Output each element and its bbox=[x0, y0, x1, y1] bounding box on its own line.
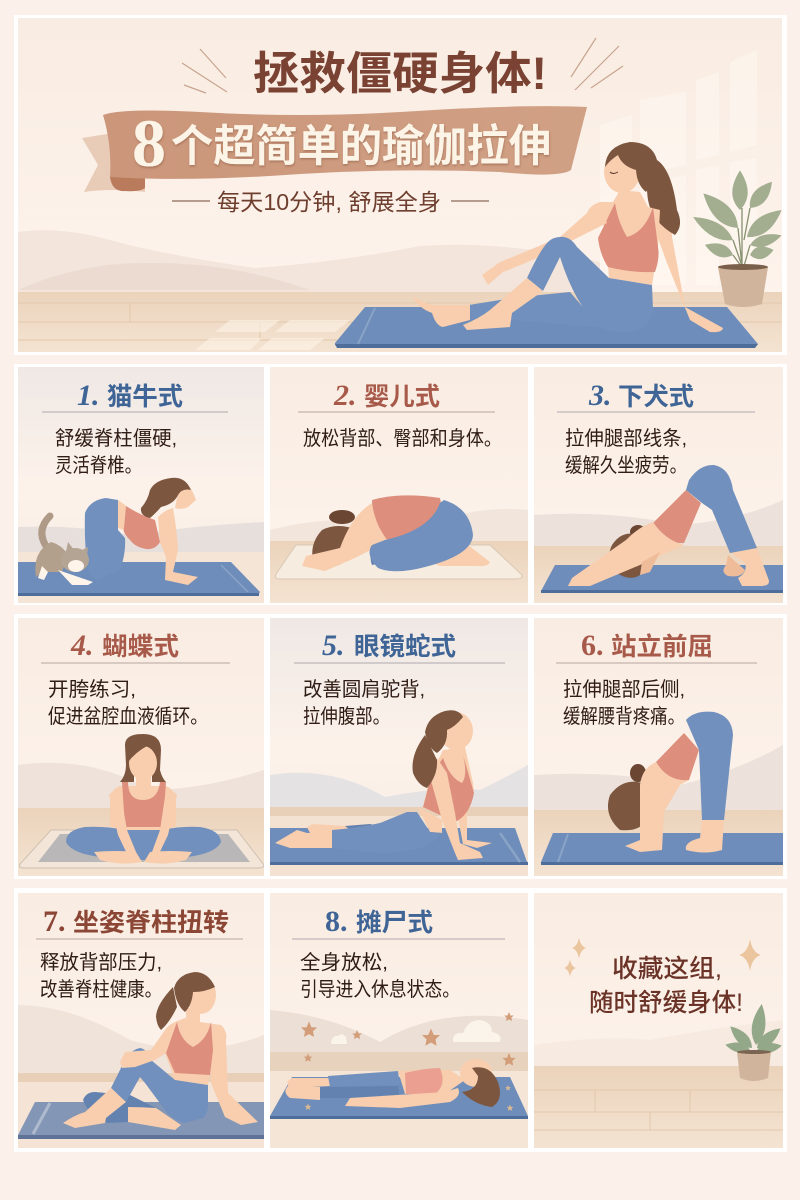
figure: child pose bbox=[302, 495, 490, 571]
panel: 5 cobra bbox=[270, 618, 528, 876]
figure: downward dog bbox=[568, 465, 769, 586]
ribbon banner bbox=[82, 105, 587, 192]
figure: cat-cow pose bbox=[85, 478, 198, 585]
panel: 2 child pose bbox=[270, 367, 528, 603]
description: 放松背部、臀部和身体。 bbox=[303, 427, 502, 450]
panel: 3 downward dog bbox=[534, 367, 783, 603]
figure: seated twist bbox=[63, 972, 258, 1130]
heading: 站立前屈 bbox=[611, 633, 713, 661]
heading: 5. bbox=[322, 629, 344, 662]
description: 开胯练习, bbox=[48, 678, 136, 701]
panel: 1 cat-cow bbox=[18, 367, 264, 603]
icon: potted plant bbox=[724, 1003, 784, 1081]
description bbox=[303, 678, 425, 728]
panel: 6 standing forward fold bbox=[534, 618, 783, 876]
yoga mat bbox=[270, 828, 528, 865]
closing message: 随时舒缓身体! bbox=[589, 989, 743, 1017]
figure: seated woman bbox=[413, 142, 723, 332]
ribbon banner: 8 bbox=[132, 105, 166, 181]
description: 灵活脊椎。 bbox=[55, 454, 142, 477]
icon: cat bbox=[35, 516, 93, 585]
panel: hero banner bbox=[18, 18, 786, 352]
description: 全身放松, bbox=[300, 951, 388, 974]
description: 拉伸腹部。 bbox=[303, 705, 390, 728]
figure: butterfly pose bbox=[66, 734, 221, 864]
heading: 眼镜蛇式 bbox=[354, 632, 456, 661]
figure: corpse pose bbox=[285, 1059, 500, 1108]
yoga mat bbox=[541, 565, 783, 593]
closing message: 收藏这组, bbox=[612, 955, 722, 983]
yoga mat bbox=[18, 562, 260, 596]
panel: 4 butterfly bbox=[18, 618, 264, 876]
description: 拉伸腿部后侧, bbox=[563, 678, 685, 701]
heading: 4. bbox=[70, 629, 94, 662]
yoga mat bbox=[335, 307, 758, 348]
description: 缓解腰背疼痛。 bbox=[563, 705, 685, 728]
description: 改善圆肩驼背, bbox=[303, 678, 425, 701]
heading: 2. bbox=[333, 379, 356, 412]
description: 舒缓脊柱僵硬, bbox=[55, 427, 177, 450]
heading: 3. bbox=[588, 379, 612, 412]
description bbox=[40, 951, 162, 1001]
description: 拉伸腿部线条, bbox=[565, 427, 687, 450]
description: 促进盆腔血液循环。 bbox=[48, 705, 208, 728]
icon: clouds bbox=[331, 1020, 501, 1044]
description bbox=[48, 679, 196, 726]
description bbox=[300, 951, 460, 1001]
heading: 7. bbox=[43, 905, 66, 938]
heading: 摊尸式 bbox=[356, 909, 433, 937]
heading: 下犬式 bbox=[618, 383, 694, 411]
rays bbox=[182, 38, 623, 93]
icon: potted plant bbox=[690, 170, 786, 307]
heading: 1. bbox=[77, 379, 100, 412]
yoga mat bbox=[270, 1077, 528, 1119]
ribbon banner: 个超简单的瑜伽拉伸 bbox=[171, 122, 551, 171]
panel: 7 seated twist bbox=[18, 893, 264, 1148]
heading: 8. bbox=[325, 905, 348, 938]
figure: cobra pose bbox=[275, 710, 492, 860]
description bbox=[55, 427, 177, 477]
description bbox=[563, 678, 685, 728]
heading: 婴儿式 bbox=[364, 383, 440, 411]
heading: 坐姿脊柱扭转 bbox=[73, 909, 229, 937]
panel: 9 call to action bbox=[534, 893, 784, 1148]
description: 引导进入休息状态。 bbox=[300, 978, 460, 1001]
icon: stars bbox=[301, 1012, 516, 1066]
title: 拯救僵硬身体! bbox=[253, 48, 547, 99]
yoga mat bbox=[541, 833, 783, 865]
description bbox=[565, 427, 687, 477]
heading: 6. bbox=[581, 629, 604, 662]
description: 改善脊柱健康。 bbox=[40, 978, 162, 1001]
description: 释放背部压力, bbox=[40, 951, 162, 974]
closing message bbox=[589, 955, 743, 1017]
subtitle: 每天10分钟, 舒展全身 bbox=[217, 189, 441, 215]
heading: 猫牛式 bbox=[107, 383, 183, 411]
figure: standing forward fold bbox=[608, 712, 733, 852]
panel: 8 corpse pose bbox=[270, 893, 528, 1148]
yoga mat bbox=[276, 545, 522, 579]
yoga mat bbox=[20, 830, 264, 868]
heading: 蝴蝶式 bbox=[102, 633, 179, 661]
yoga mat bbox=[18, 1102, 264, 1139]
description: 缓解久坐疲劳。 bbox=[565, 454, 687, 477]
icon: sparkles bbox=[564, 937, 761, 977]
